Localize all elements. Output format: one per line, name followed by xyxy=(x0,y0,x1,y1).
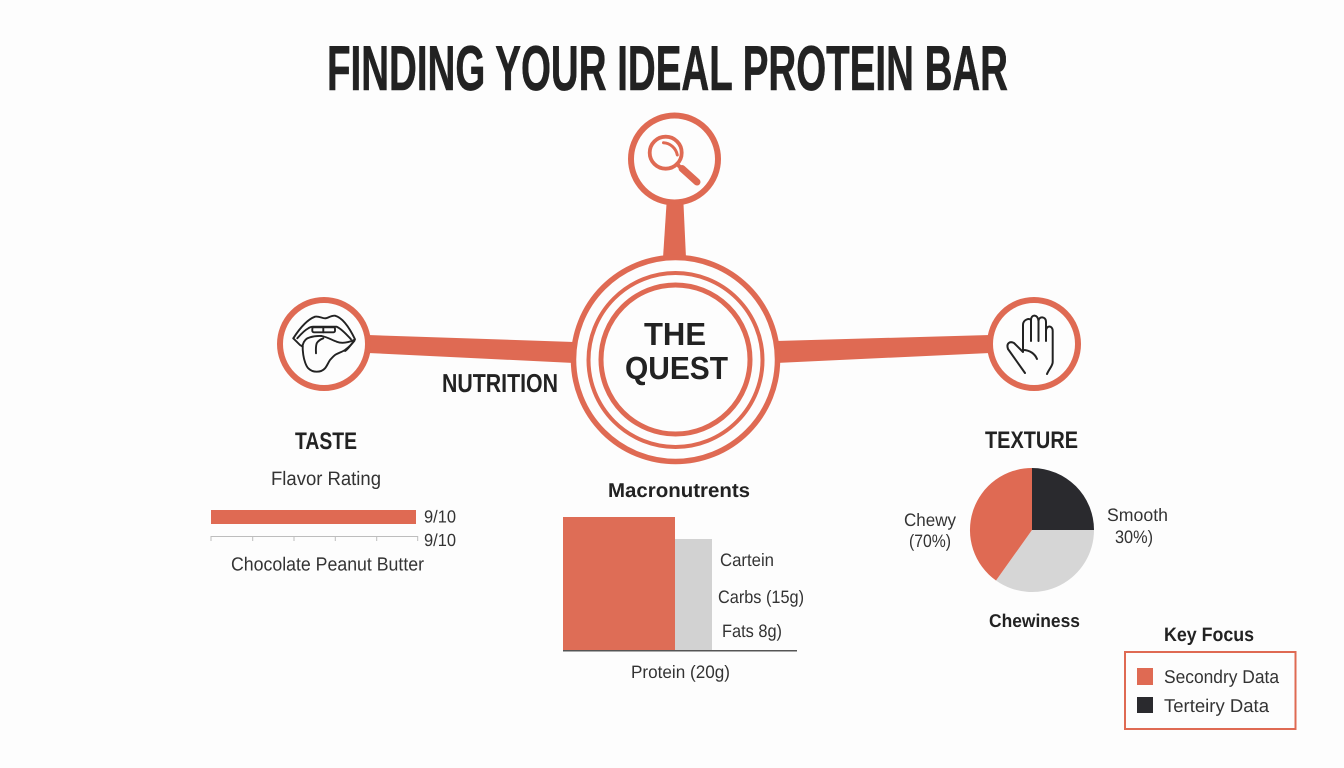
icon: hand xyxy=(1007,316,1053,374)
hub label: QUEST xyxy=(625,350,728,386)
label: fats: Fats 8g) xyxy=(722,621,782,641)
caption: chewiness: Chewiness xyxy=(989,610,1080,631)
bar: flavor score xyxy=(211,510,416,524)
connector: left xyxy=(368,335,574,363)
node: texture xyxy=(990,300,1078,388)
label: smooth: 30%) xyxy=(1115,527,1153,547)
panel: taste xyxy=(211,428,456,576)
heading: taste: TASTE xyxy=(295,428,357,455)
label: cartein: Cartein xyxy=(720,550,774,570)
label: smooth xyxy=(1107,505,1168,547)
label: protein: Protein (20g) xyxy=(631,662,730,682)
connector: right xyxy=(776,335,990,363)
bar: protein xyxy=(563,517,675,650)
label: carbs: Carbs (15g) xyxy=(718,587,804,607)
heading: texture: TEXTURE xyxy=(985,427,1078,454)
node: taste xyxy=(280,300,368,388)
subheading: flavor rating: Flavor Rating xyxy=(271,468,381,490)
connector: top xyxy=(663,204,686,258)
hub label xyxy=(625,316,728,386)
legend box xyxy=(1125,652,1296,729)
label: chewy: (70%) xyxy=(909,531,951,551)
bar value: 9/10 xyxy=(424,506,456,526)
label: chewy: Chewy xyxy=(904,510,956,530)
icon: magnifying glass xyxy=(650,137,697,182)
icon: mouth with tongue xyxy=(293,316,355,372)
legend item: secondary: Secondry Data xyxy=(1164,666,1280,687)
panel: macronutrients xyxy=(563,480,804,682)
baseline xyxy=(563,650,797,652)
pie chart xyxy=(970,468,1094,592)
bar: carbs xyxy=(675,539,712,650)
label: nutrition: NUTRITION xyxy=(442,368,558,398)
label: smooth: Smooth xyxy=(1107,505,1168,525)
node: search xyxy=(631,116,718,202)
legend item: tertiary: Terteiry Data xyxy=(1164,695,1270,716)
panel: texture xyxy=(904,427,1168,631)
scale value: 9/10 xyxy=(424,530,456,550)
hub label: THE xyxy=(644,316,706,352)
hub: the quest xyxy=(574,258,778,462)
legend xyxy=(1125,624,1296,729)
label: chewy xyxy=(904,510,956,551)
heading: macronutrents: Macronutrents xyxy=(608,480,750,502)
scale axis xyxy=(211,536,418,541)
legend title: Key Focus xyxy=(1164,624,1254,646)
flavor name: Chocolate Peanut Butter xyxy=(231,554,425,576)
